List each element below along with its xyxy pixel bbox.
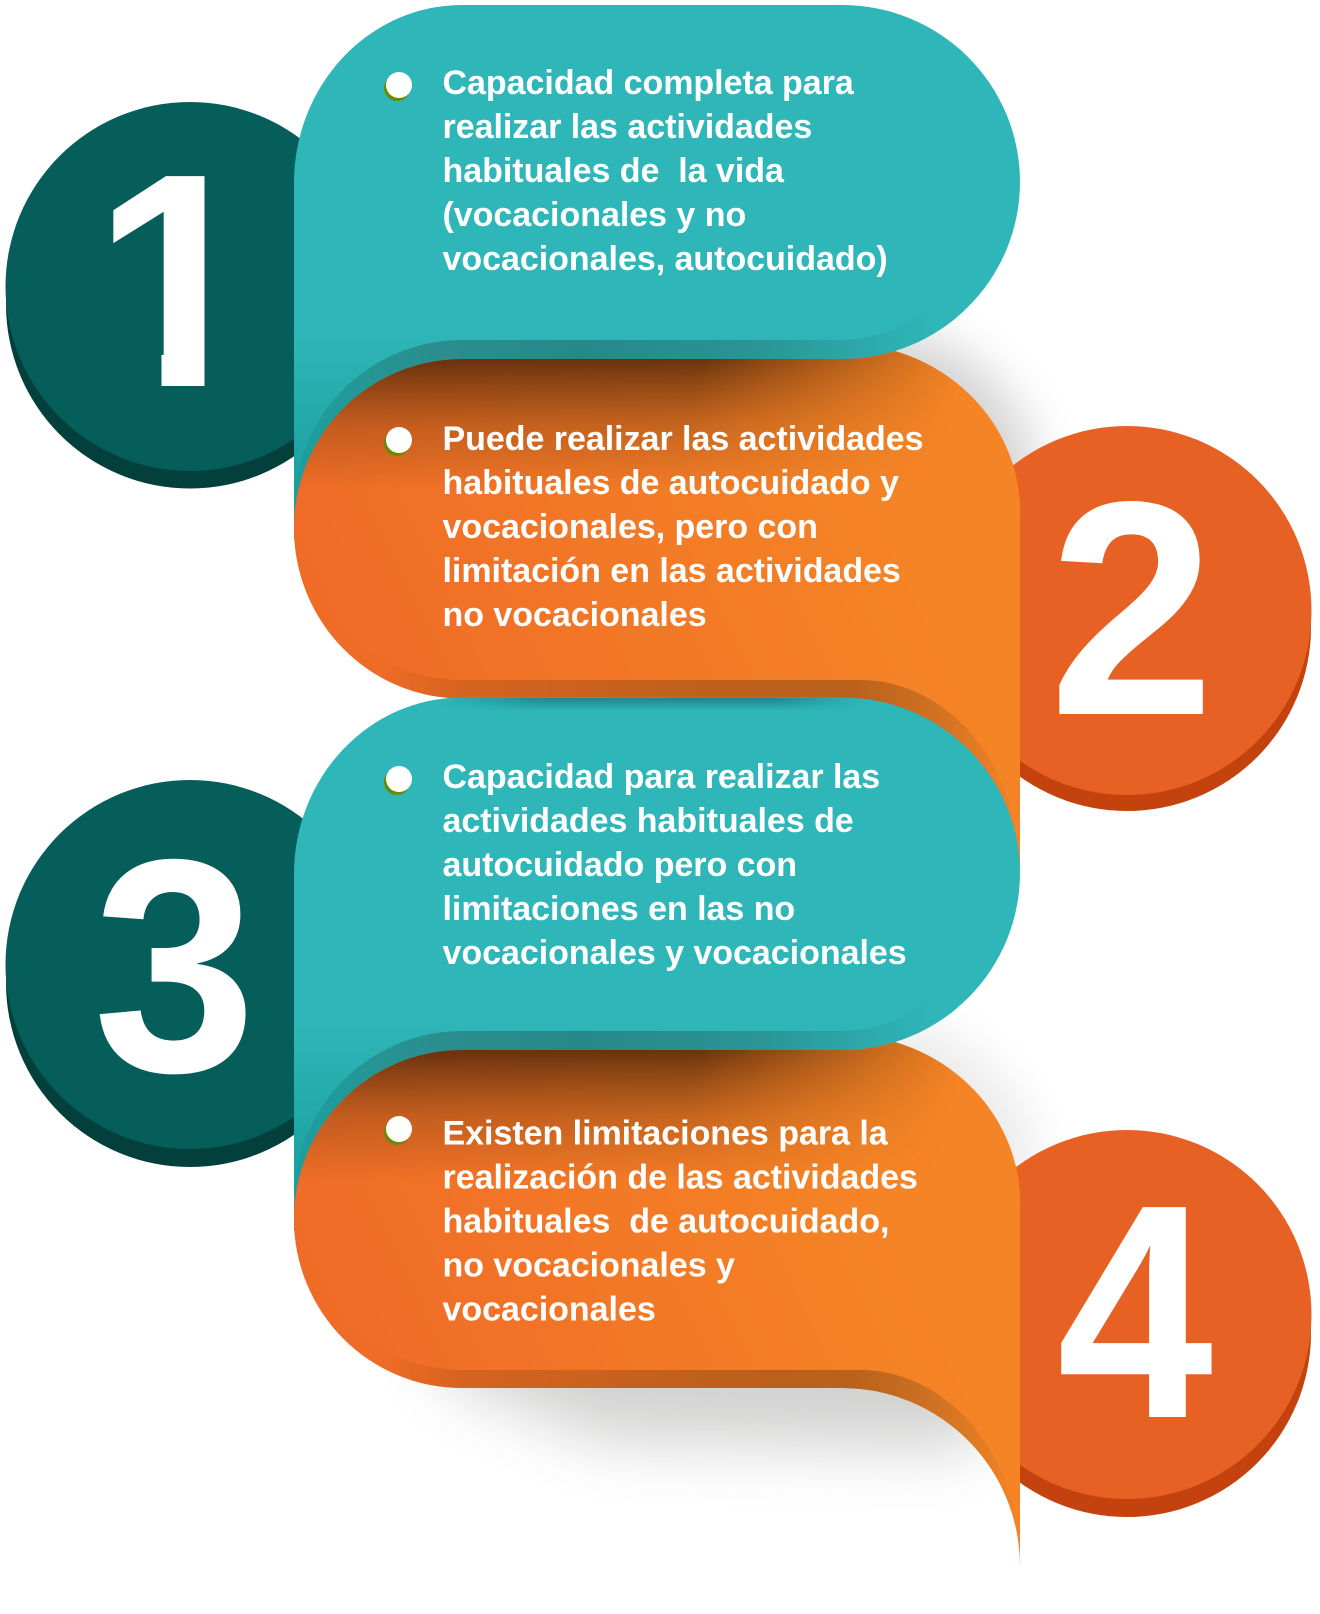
- number badge 1: 1: [92, 110, 262, 451]
- panel: teal 3: [294, 698, 1020, 1231]
- number badge 4: 4: [1057, 1142, 1215, 1483]
- text block 3: actividades habituales de: [442, 802, 854, 840]
- text block 1: vocacionales, autocuidado): [442, 240, 888, 278]
- text block 3: limitaciones en las no: [442, 890, 795, 928]
- teal 3 top inner shadow: [457, 698, 846, 709]
- panel: orange 4 with tail: [294, 1042, 1020, 1566]
- number badge 3: [6, 780, 374, 1167]
- bullet 2: [384, 427, 412, 456]
- shadow: below last orange panel: [440, 1290, 1000, 1450]
- bullet 1: [384, 72, 412, 101]
- text block 1: habituales de la vida: [442, 152, 785, 190]
- bullet 3: [384, 766, 412, 795]
- text block 4: Existen limitaciones para la: [442, 1114, 889, 1152]
- text block 1: Capacidad completa para: [442, 64, 855, 102]
- text block 4: habituales de autocuidado,: [442, 1202, 889, 1240]
- text block 2: limitación en las actividades: [442, 552, 901, 590]
- bullet 4: [384, 1116, 412, 1145]
- number badge 2: 2: [1049, 438, 1215, 779]
- text block 2: [442, 420, 924, 634]
- shadow: behind second orange panel: [840, 1021, 1040, 1211]
- text block 4: vocacionales: [442, 1290, 656, 1328]
- shadow: behind first orange panel: [840, 330, 1040, 520]
- text block 3: Capacidad para realizar las: [442, 758, 880, 796]
- text block 3: vocacionales y vocacionales: [442, 934, 907, 972]
- text block 2: habituales de autocuidado y: [442, 464, 899, 502]
- text block 2: Puede realizar las actividades: [442, 420, 924, 458]
- text block 2: vocacionales, pero con: [442, 508, 818, 546]
- text block 2: no vocacionales: [442, 596, 707, 634]
- text block 4: no vocacionales y: [442, 1246, 735, 1284]
- text block 4: realización de las actividades: [442, 1158, 918, 1196]
- text block 4: [442, 1114, 918, 1328]
- panel: teal 1: [294, 5, 1020, 540]
- number badge 4: [942, 1130, 1312, 1517]
- number badge 1: [6, 102, 300, 488]
- text block 3: [442, 758, 907, 972]
- text block 3: autocuidado pero con: [442, 846, 797, 884]
- panel: orange 2: [294, 351, 1020, 871]
- number badge 3: 3: [93, 797, 256, 1136]
- number badge 2: [942, 426, 1312, 811]
- text block 1: (vocacionales y no: [442, 196, 746, 234]
- text block 1: [442, 64, 888, 278]
- text block 1: realizar las actividades: [442, 108, 812, 146]
